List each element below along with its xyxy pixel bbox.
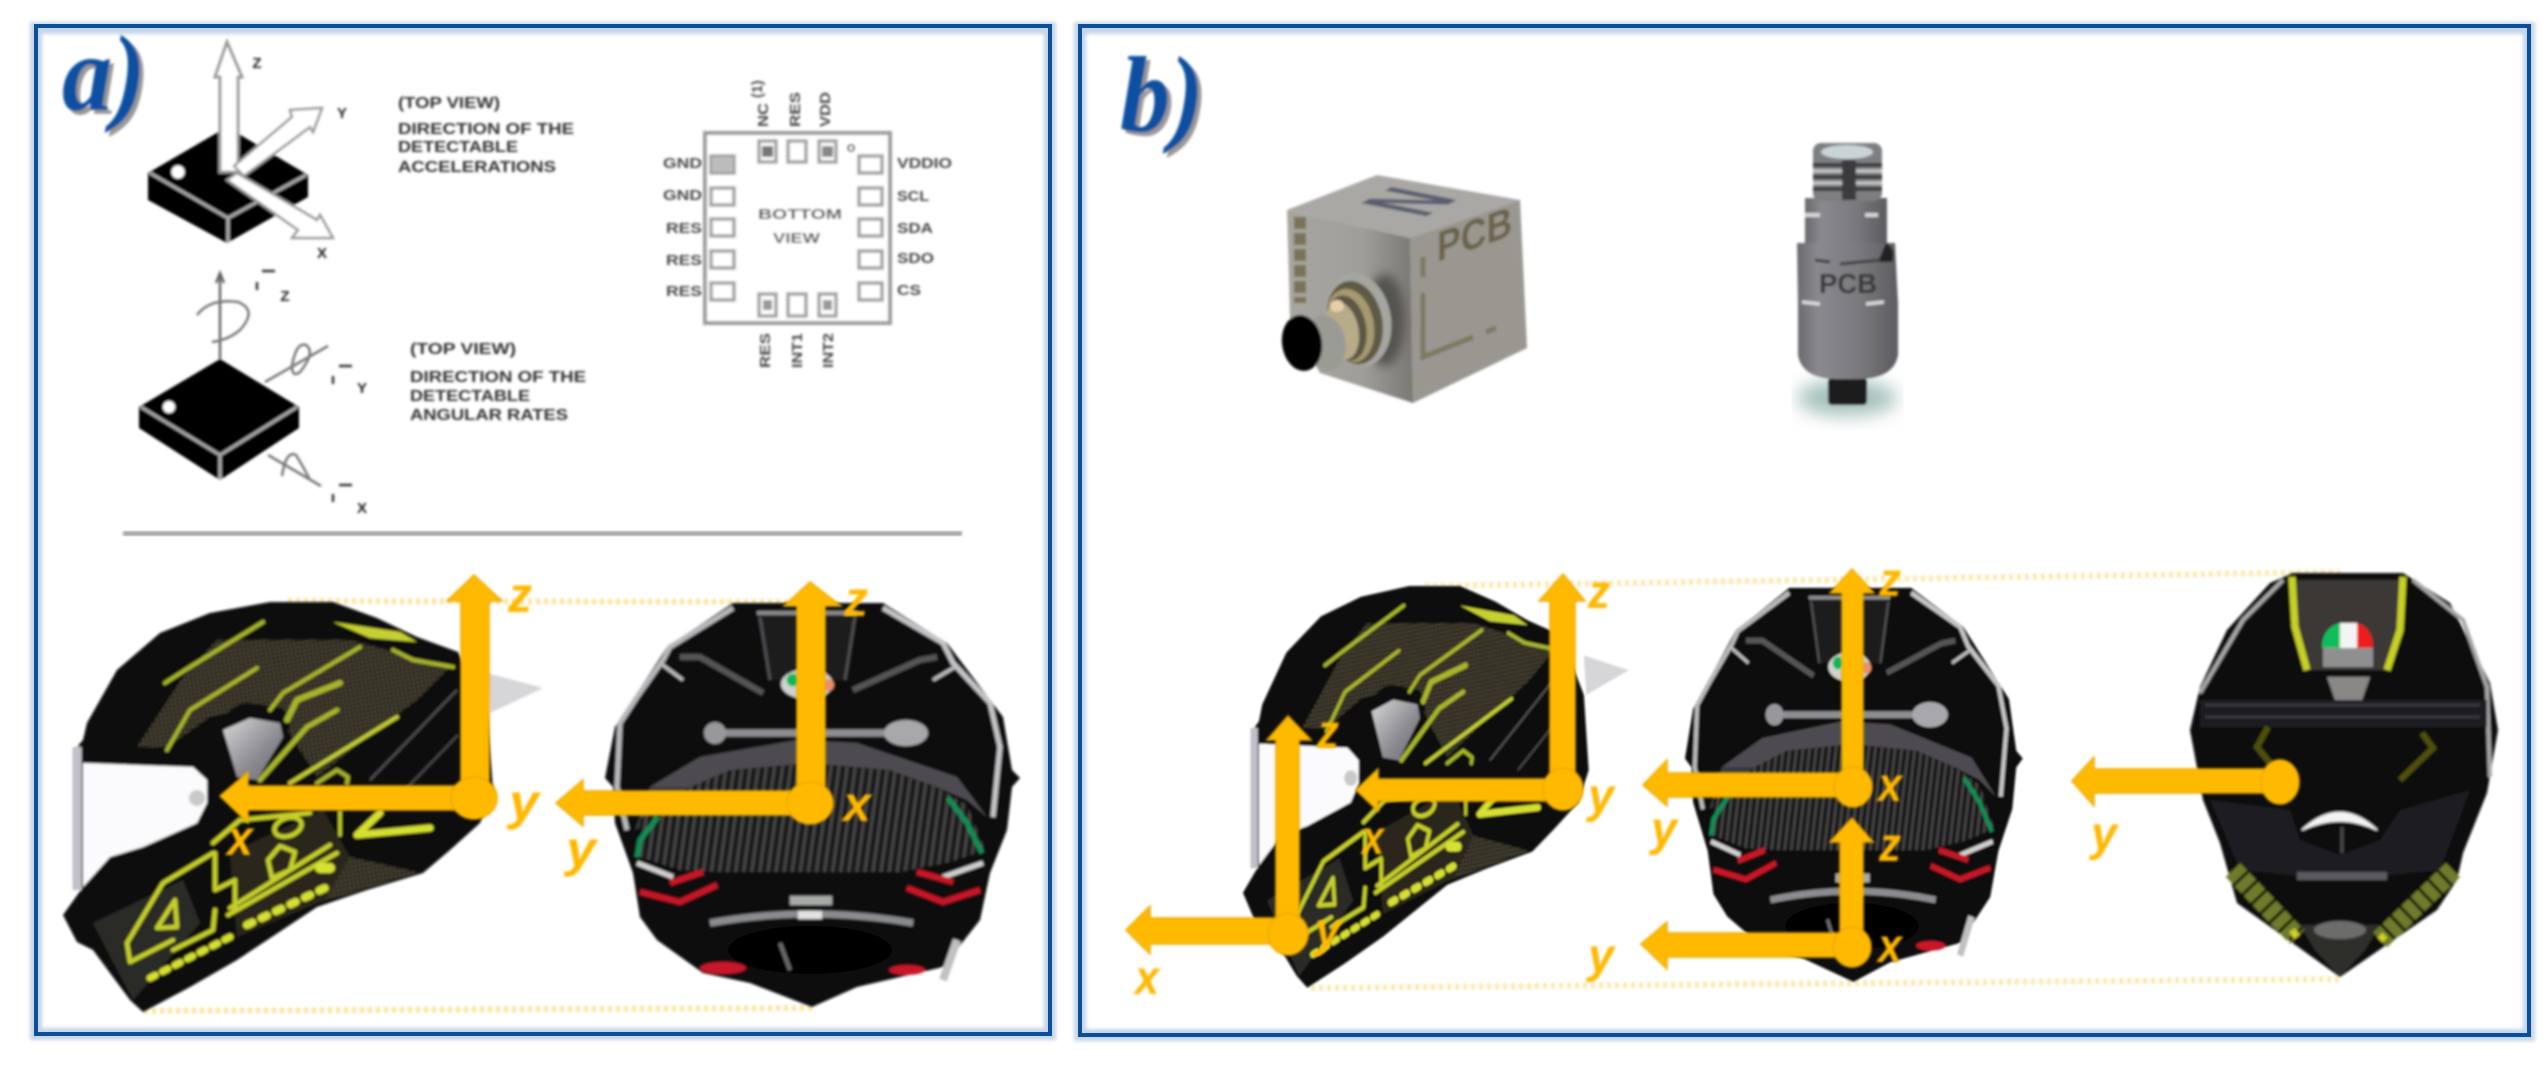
chart: bottom view pinout diagram: GND (663, 156, 702, 172)
chart: bottom view pinout diagram: VDDIO (897, 156, 952, 172)
image: cube accelerometer: PCB (1437, 197, 1512, 271)
label: side helmet lower axis letters panel b: y (1313, 904, 1343, 957)
label: rear helmet upper axis letters panel b: y (1649, 803, 1679, 856)
chart: bottom view pinout diagram: SDA (897, 221, 934, 237)
image: cube accelerometer (1278, 175, 1527, 403)
chart: bottom view pinout diagram (663, 80, 952, 368)
label: side helmet axis letters panel a: y (506, 774, 541, 830)
text: detectable accelerations caption (398, 95, 574, 176)
heading: a): a) (62, 15, 146, 134)
icon: chip with detectable accelerations axes (148, 42, 347, 262)
text: detectable angular rates caption: DETECTABLE (410, 388, 530, 405)
text: detectable accelerations caption: DETECTABLE (398, 139, 518, 156)
arrow: rear helmet lower axes panel b (1641, 818, 1873, 969)
label: rear helmet axis letters panel a (563, 571, 873, 877)
text: detectable accelerations caption: DIRECTION OF THE (398, 121, 574, 138)
chart: bottom view pinout diagram: RES (666, 284, 702, 300)
chart: bottom view pinout diagram: o (847, 140, 856, 156)
icon: chip with detectable accelerations axes: Z (252, 55, 262, 72)
label: rear helmet axis letters panel a: x (840, 776, 873, 832)
label: side helmet upper axis letters panel b: y (1586, 770, 1616, 823)
label: rear helmet axis letters panel a: z (843, 571, 868, 627)
label: rear helmet upper axis letters panel b (1649, 554, 1904, 856)
arrow: side helmet lower axes panel b (1126, 716, 1311, 955)
image: cube accelerometer: N (1338, 181, 1480, 222)
chart: bottom view pinout diagram: SCL (897, 189, 929, 205)
arrow: front helmet axis panel b (2072, 757, 2299, 806)
guide lines: panel a dashed extents (144, 601, 814, 1011)
heading: b): b) (1120, 36, 1204, 155)
panel b: frame (1080, 26, 2529, 1035)
label: side helmet lower axis letters panel b (1132, 706, 1343, 1005)
text: detectable angular rates caption (410, 341, 586, 424)
label: side helmet upper axis letters panel b (1360, 566, 1616, 865)
text: detectable angular rates caption: (TOP VIEW) (410, 341, 516, 358)
guide lines: panel b dashed extents (1311, 572, 2340, 988)
image: threaded stud accelerometer (1797, 143, 1898, 416)
text: detectable angular rates caption: DIRECTION OF THE (410, 369, 586, 386)
icon: chip with detectable accelerations axes: Y (337, 105, 347, 122)
label: front helmet axis letter panel b: y (2089, 808, 2119, 861)
arrow: rear helmet axes panel a (556, 582, 841, 826)
image: rear helmet panel b (1685, 588, 2023, 982)
chart: bottom view pinout diagram: RES (666, 221, 702, 237)
chart: bottom view pinout diagram: BOTTOM (758, 207, 842, 223)
label: side helmet lower axis letters panel b: z (1316, 706, 1339, 759)
chart: bottom view pinout diagram: NC (756, 102, 772, 127)
chart: bottom view pinout diagram: RES (666, 253, 702, 269)
chart: bottom view pinout diagram: RES (788, 92, 804, 127)
text: detectable accelerations caption: (TOP VIEW) (398, 95, 500, 112)
label: rear helmet axis letters panel a: y (563, 821, 598, 877)
image: front helmet panel b (2190, 573, 2498, 977)
chart: bottom view pinout diagram: VIEW (773, 231, 820, 247)
icon: chip with detectable angular rates (139, 271, 367, 517)
image: threaded stud accelerometer: PCB (1819, 268, 1877, 299)
arrow: rear helmet upper axes panel b (1643, 569, 1874, 807)
label: side helmet axis letters panel a: x (224, 810, 255, 866)
icon: chip with detectable angular rates: X (357, 500, 367, 517)
label: side helmet upper axis letters panel b: z (1587, 566, 1610, 619)
chart: bottom view pinout diagram: VDD (818, 92, 834, 127)
arrow: side helmet upper axes panel b (1356, 574, 1585, 811)
label: side helmet upper axis letters panel b: x (1360, 812, 1386, 865)
label: rear helmet lower axis letters panel b: z (1878, 819, 1901, 872)
label: side helmet axis letters panel a: z (507, 567, 532, 623)
heading: b): b) (1124, 40, 1208, 159)
label: rear helmet lower axis letters panel b: y (1586, 930, 1616, 983)
label: rear helmet upper axis letters panel b: z (1878, 554, 1901, 607)
heading: a): a) (66, 19, 150, 138)
chart: bottom view pinout diagram: CS (897, 283, 921, 299)
label: side helmet lower axis letters panel b: x (1132, 952, 1161, 1005)
label: rear helmet upper axis letters panel b: x (1875, 759, 1904, 812)
icon: chip with detectable angular rates: Y (357, 380, 367, 397)
text: detectable accelerations caption: ACCELERATIONS (398, 159, 556, 176)
panel a: frame (36, 26, 1050, 1034)
chart: bottom view pinout diagram: INT2 (821, 333, 837, 368)
chart: bottom view pinout diagram: SDO (897, 251, 934, 267)
text: detectable angular rates caption: ANGULAR RATES (410, 407, 568, 424)
arrow: side helmet axes panel a (220, 575, 502, 823)
icon: chip with detectable angular rates: Z (280, 288, 290, 305)
image: rear helmet panel a (605, 603, 1020, 1007)
label: side helmet axis letters panel a (224, 567, 541, 866)
divider: horizontal rule in panel a (123, 531, 962, 536)
image: side helmet panel a (63, 602, 543, 1012)
label: rear helmet lower axis letters panel b: x (1875, 920, 1904, 973)
chart: bottom view pinout diagram: (1) (750, 80, 766, 98)
chart: bottom view pinout diagram: GND (663, 188, 702, 204)
label: rear helmet lower axis letters panel b (1586, 819, 1904, 983)
image: side helmet panel b (1243, 586, 1629, 988)
icon: chip with detectable accelerations axes: X (317, 245, 327, 262)
chart: bottom view pinout diagram: INT1 (790, 333, 806, 368)
chart: bottom view pinout diagram: RES (758, 333, 774, 368)
